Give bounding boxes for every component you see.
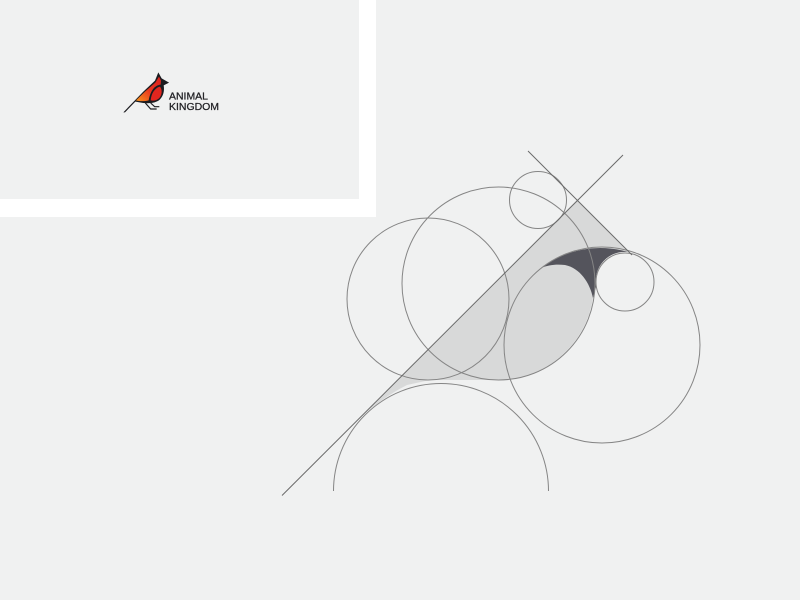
construction lines — [282, 151, 632, 496]
construction circles — [334, 172, 700, 491]
shape: dark wing fill — [541, 248, 628, 298]
chart: geometric construction of the bird — [282, 151, 700, 496]
text: brand name: ANIMAL — [169, 92, 208, 102]
icon: cardinal bird logo — [123, 72, 169, 112]
text: brand name: KINGDOM — [169, 102, 219, 113]
text: brand name — [169, 92, 219, 113]
shape: light gray bird body fill — [362, 200, 628, 416]
panel: logo card with white frame — [0, 0, 376, 217]
